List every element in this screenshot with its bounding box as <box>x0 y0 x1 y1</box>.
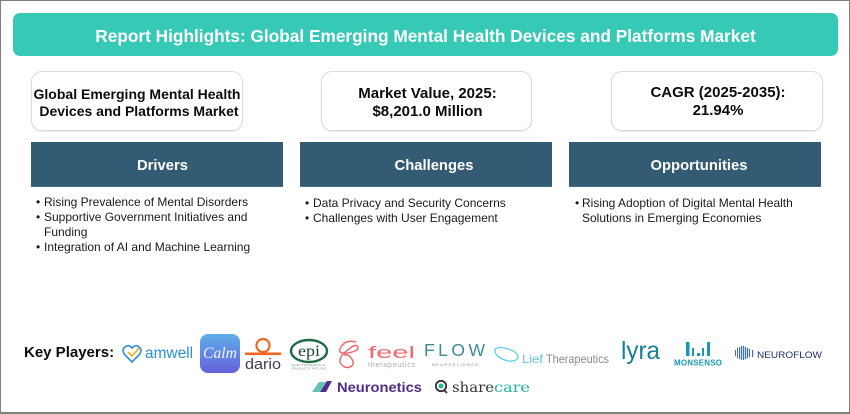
logos <box>122 334 822 396</box>
logo: flow neuroscience: FLOW <box>424 340 485 360</box>
logo: neuroflow <box>735 346 822 361</box>
logo: epi <box>291 340 327 370</box>
logo: epi: PRODUCTS INTL INC <box>292 366 327 370</box>
logo: sharecare: share <box>452 380 494 396</box>
list: drivers: Integration of AI and Machine Learning <box>44 240 250 254</box>
text: • <box>575 196 579 210</box>
card: market value <box>321 71 532 131</box>
logo: feel therapeutics <box>340 341 416 369</box>
card: market name: Global Emerging Mental Health <box>34 86 240 102</box>
heading: opportunities <box>569 142 821 187</box>
logo: lyra: lyra <box>621 337 660 365</box>
heading: drivers: Drivers <box>137 158 188 174</box>
logo: calm: Calm <box>203 345 237 362</box>
heading: challenges: Challenges <box>395 158 473 174</box>
logo: neuronetics: Neuronetics <box>337 379 422 395</box>
logo: dario: dario <box>245 356 281 373</box>
logo: monsenso: MONSENSO <box>674 358 722 368</box>
logo: calm <box>200 334 240 373</box>
list: opportunities: Rising Adoption of Digital Mental Health <box>582 196 793 210</box>
list: challenges: Challenges with User Engagement <box>313 211 498 225</box>
card: CAGR: CAGR (2025-2035): <box>650 84 786 101</box>
logo: epi: epi <box>298 343 321 360</box>
logo: feel therapeutics: therapeutics <box>368 362 416 369</box>
logo: sharecare: care <box>494 380 530 396</box>
heading: drivers <box>31 142 283 187</box>
heading: challenges <box>300 142 552 187</box>
title banner: Report Highlights: Global Emerging Mental Health Devices and Platforms Market <box>95 26 756 46</box>
logo: amwell <box>123 345 193 362</box>
logo: sharecare <box>436 380 530 396</box>
list: challenges <box>305 196 506 225</box>
list: drivers: Funding <box>44 225 87 239</box>
logo: lief therapeutics: Lief <box>522 352 544 366</box>
list: drivers <box>36 195 250 254</box>
list: drivers: Supportive Government Initiatives and <box>44 210 247 224</box>
text: • <box>36 240 40 254</box>
text: • <box>36 210 40 224</box>
logo: flow neuroscience: NEUROSCIENCE <box>432 362 478 367</box>
logo: lief therapeutics: Therapeutics <box>546 352 609 366</box>
logo: neuroflow: NEUROFLOW <box>757 350 822 361</box>
title banner <box>13 13 838 56</box>
logo: monsenso <box>674 342 722 368</box>
list: opportunities <box>575 196 793 225</box>
card: CAGR <box>611 71 823 131</box>
list: opportunities: Solutions in Emerging Economies <box>582 211 761 225</box>
text: • <box>36 195 40 209</box>
logo: lief therapeutics <box>495 348 609 366</box>
key players label: Key Players: <box>24 344 114 361</box>
card: market value: $8,201.0 Million <box>372 103 483 120</box>
text: • <box>305 211 309 225</box>
card: market value: Market Value, 2025: <box>358 85 497 102</box>
logo: feel therapeutics: feel <box>368 343 415 362</box>
text: • <box>305 196 309 210</box>
card: market name <box>31 71 243 131</box>
card: CAGR: 21.94% <box>693 102 743 119</box>
logo: dario <box>245 339 281 373</box>
heading: opportunities: Opportunities <box>650 158 748 174</box>
logo: epi: ELECTROMEDICAL <box>292 363 326 367</box>
logo: amwell: amwell <box>145 345 193 362</box>
card: market name: Devices and Platforms Market <box>39 103 239 119</box>
list: challenges: Data Privacy and Security Concerns <box>313 196 506 210</box>
list: drivers: Rising Prevalence of Mental Disorders <box>44 195 248 209</box>
